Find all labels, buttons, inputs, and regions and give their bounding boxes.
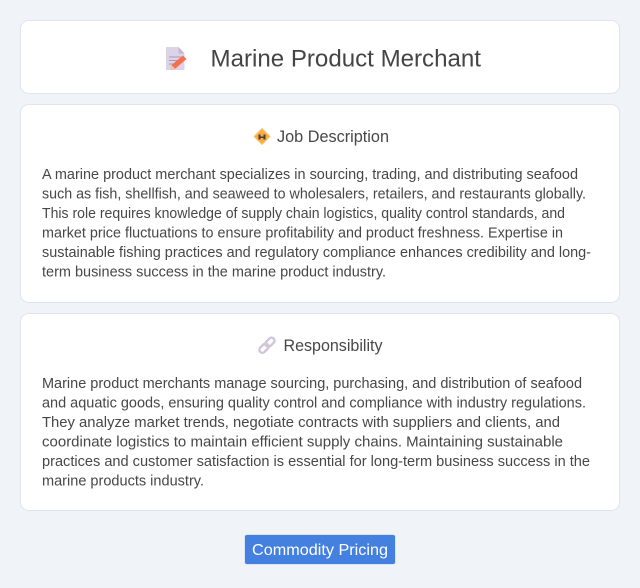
text block: responsibility: Marine product merchants manage sourcing, purchasing, and distribution of seafood — [42, 376, 582, 392]
text block: responsibility: marine products industry. — [42, 474, 204, 490]
text block: job description: A marine product merchant specializes in sourcing, trading, and distributing seafood — [42, 167, 578, 183]
icon: document with pencil — [166, 47, 186, 70]
panel: responsibility — [20, 314, 620, 510]
text block: job description: This role requires knowledge of supply chain logistics, quality control standards, and — [42, 206, 565, 222]
text block: responsibility: and aquatic goods, ensuring quality control and compliance with industry regulations. — [42, 396, 586, 412]
text block: responsibility: coordinate logistics to maintain efficient supply chains. Maintaining sustainable — [42, 434, 563, 450]
text block: job description: market price fluctuations to ensure profitability and product freshness. Expertise in — [42, 226, 563, 242]
heading: responsibility: Responsibility — [284, 337, 383, 355]
text block: job description: such as fish, shellfish, and seaweed to wholesalers, retailers, and restaurants globally. — [42, 186, 586, 202]
panel: job description — [20, 104, 620, 302]
button: commodity pricing — [244, 534, 396, 564]
text block: responsibility: practices and customer satisfaction is essential for long-term business success in the — [42, 454, 590, 470]
icon: diamond sign — [254, 128, 270, 144]
text block: job description: term business success in the marine product industry. — [42, 264, 386, 280]
title: Marine Product Merchant — [210, 46, 481, 72]
text block: responsibility — [42, 376, 590, 490]
text block: responsibility: They analyze market trends, negotiate contracts with suppliers and clients, and — [42, 415, 560, 431]
text block: job description — [42, 167, 591, 280]
button: commodity pricing: Commodity Pricing — [252, 542, 388, 559]
panel: title card — [20, 20, 620, 94]
heading: job description: Job Description — [277, 128, 389, 146]
icon: chain link — [258, 336, 276, 354]
text block: job description: sustainable fishing practices and regulatory compliance enhances credibility and long- — [42, 245, 591, 261]
